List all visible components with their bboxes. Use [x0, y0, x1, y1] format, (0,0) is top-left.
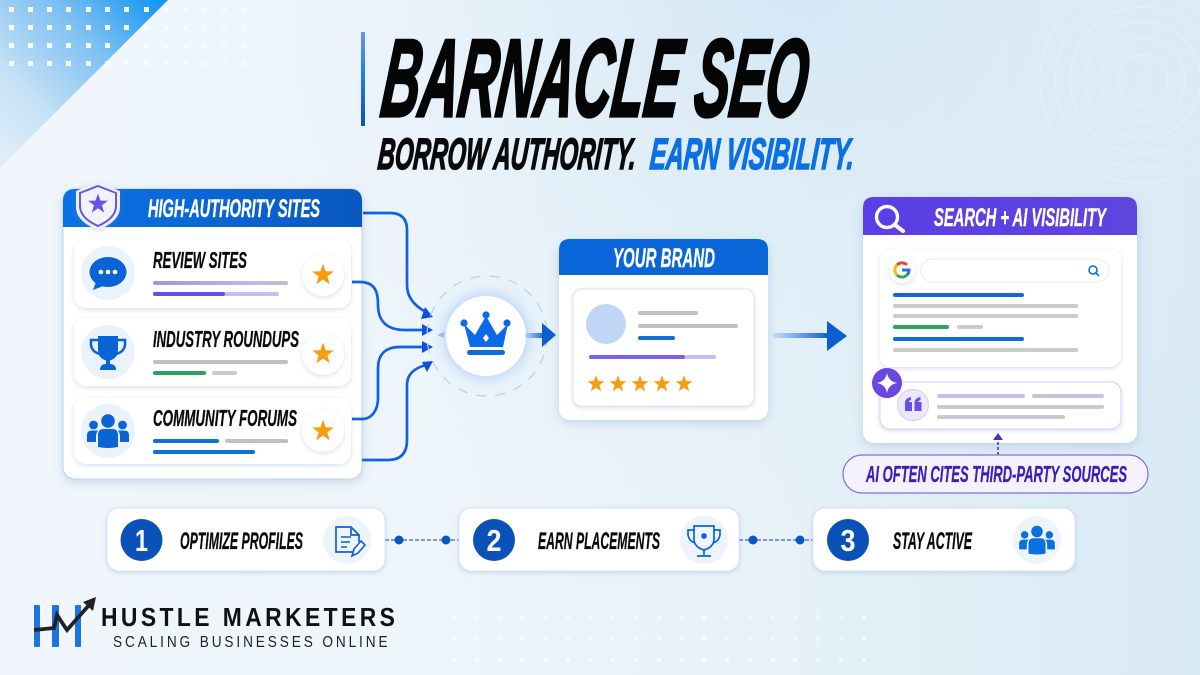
panel header [63, 189, 362, 227]
arrow: crown to brand [525, 323, 556, 347]
arrow: brand to visibility [773, 321, 847, 351]
step 3: stay active: STAY ACTIVE [893, 528, 973, 555]
icon: quote [898, 390, 928, 420]
step 2: earn placements [459, 508, 739, 571]
arrows into crown [352, 213, 433, 460]
panel header [863, 197, 1137, 235]
icon: sparkle [872, 368, 902, 398]
decorative corner triangle [0, 0, 168, 168]
icon: magnifier [876, 206, 903, 231]
panel: high-authority sites [63, 182, 362, 479]
icon: crown [460, 311, 511, 355]
search results card [880, 249, 1121, 367]
step 1: optimize profiles: OPTIMIZE PROFILES [180, 528, 303, 555]
connector 2-3 [739, 536, 813, 544]
icon: people [1019, 526, 1055, 554]
tagline: SCALING BUSINESSES ONLINE [113, 634, 388, 651]
label: COMMUNITY FORUMS [153, 405, 297, 431]
label: INDUSTRY ROUNDUPS [153, 326, 299, 352]
dashed arrow to ai card [993, 433, 1003, 455]
subtitle: BORROW AUTHORITY. [376, 130, 638, 179]
brand card [573, 289, 754, 406]
dot grid top left [9, 7, 247, 66]
icon: star [312, 342, 334, 363]
subtitle highlight: EARN VISIBILITY. [648, 130, 856, 179]
panel heading: YOUR BRAND [613, 243, 715, 273]
icon: star [312, 420, 334, 440]
hub: crown [427, 276, 547, 396]
panel: search + ai visibility [863, 197, 1137, 443]
panel heading: HIGH-AUTHORITY SITES [148, 195, 320, 223]
icon: shield [76, 182, 120, 230]
icon: people [87, 414, 129, 448]
step 2: earn placements: 2 [486, 523, 502, 558]
panel header [559, 239, 768, 275]
step 3: stay active: 3 [840, 523, 856, 558]
icon: google g [895, 263, 909, 277]
logo: hustle marketers [34, 597, 395, 651]
step 1: optimize profiles: 1 [135, 523, 148, 558]
connector 1-2 [385, 536, 459, 544]
icon: document with pen [336, 527, 365, 556]
icon: star [312, 264, 334, 284]
step 1: optimize profiles [107, 508, 385, 571]
brand name: HUSTLE MARKETERS [101, 604, 395, 632]
title accent bar [361, 32, 365, 126]
concentric rings top right [1040, 0, 1200, 183]
logo mark [34, 597, 96, 647]
ai answer card [872, 368, 1121, 429]
step 3: stay active [813, 508, 1075, 571]
row: review sites [74, 239, 351, 308]
label: REVIEW SITES [153, 247, 247, 273]
five-star rating [587, 375, 693, 391]
step 2: earn placements: EARN PLACEMENTS [538, 528, 660, 555]
title block [361, 17, 856, 179]
panel: your brand [559, 239, 768, 420]
icon: search [1089, 266, 1099, 276]
dot grid bottom [452, 615, 866, 662]
row: industry roundups [74, 318, 351, 386]
callout: ai cites third-party sources [843, 455, 1148, 493]
row: community forums [74, 398, 351, 464]
icon: chat bubble [90, 257, 126, 290]
icon: trophy outline [688, 526, 720, 556]
icon: trophy [91, 336, 125, 370]
